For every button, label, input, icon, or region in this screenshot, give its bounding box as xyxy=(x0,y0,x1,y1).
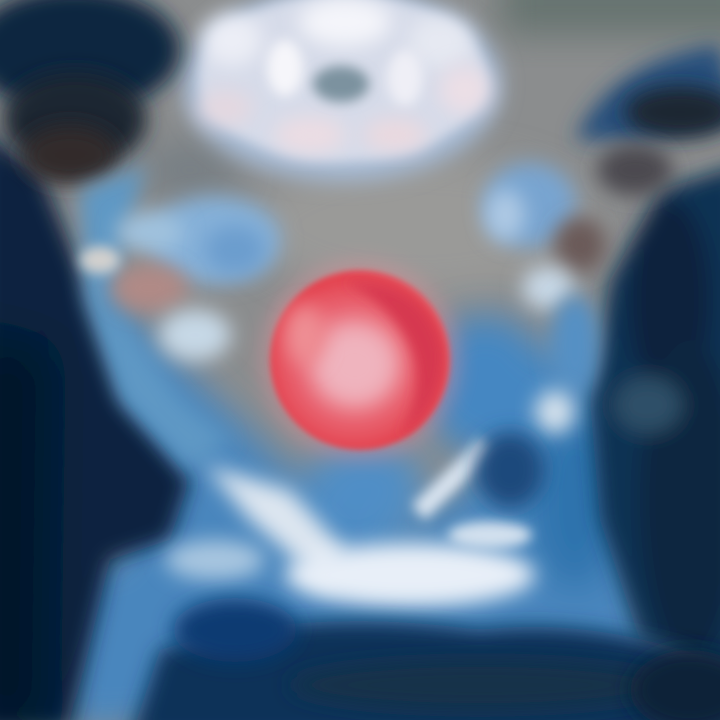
second left figure: cap, mask and hand xyxy=(80,196,281,361)
second right figure: cap, face and mask xyxy=(484,163,606,395)
highlighted red tumour sphere xyxy=(260,260,460,460)
surgical lamp xyxy=(182,0,502,182)
white cloth and instruments xyxy=(165,390,575,607)
foreground: dark patient drape xyxy=(130,598,720,720)
left surgeon: arm in light sleeve xyxy=(80,165,230,470)
left surgeon: head and cap xyxy=(0,0,180,185)
blue surgical drape xyxy=(60,270,660,720)
right surgeon: head and cap xyxy=(575,45,720,196)
right surgeon: body xyxy=(590,165,720,680)
left surgeon: body xyxy=(0,130,190,720)
